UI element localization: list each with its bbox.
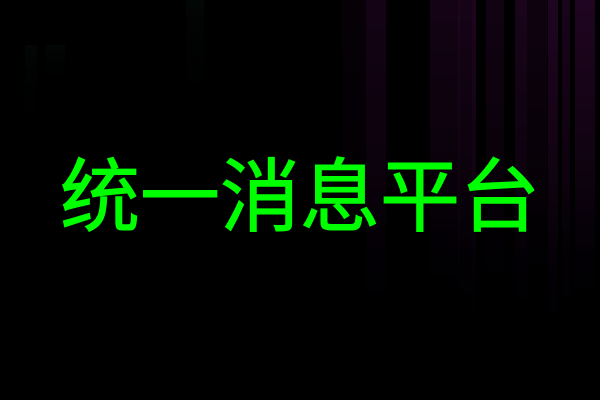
title: 统一消息平台 (60, 153, 540, 242)
